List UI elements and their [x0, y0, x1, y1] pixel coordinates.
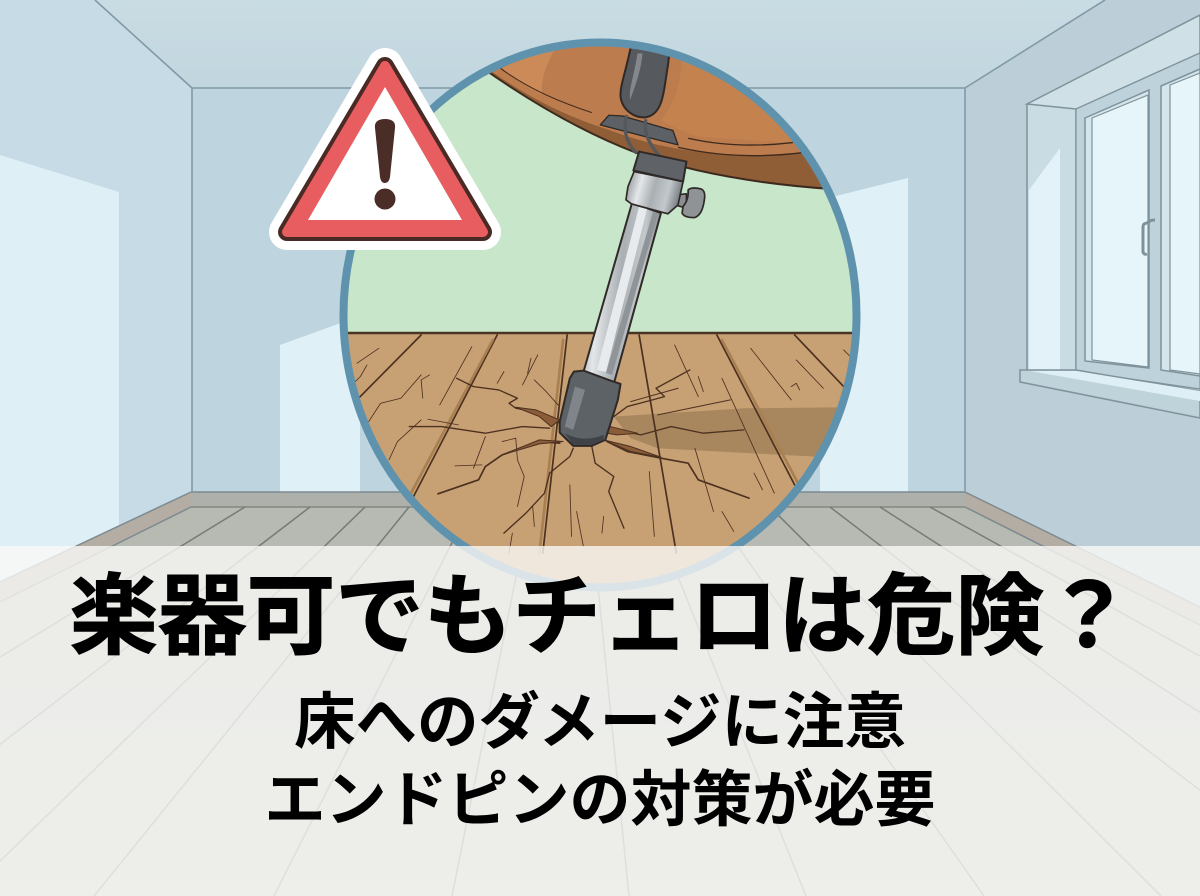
red triangle: [287, 66, 483, 232]
baseboard: [0, 492, 1200, 625]
floor planks: [0, 507, 1200, 896]
circle background wall: [344, 42, 856, 588]
translucent text panel: [0, 546, 1200, 896]
title: 楽器可でもチェロは危険？: [69, 567, 1133, 666]
fine scratches: [355, 345, 850, 553]
exclamation mark: [374, 119, 396, 210]
left wall: [0, 0, 192, 582]
main cracks: [409, 370, 749, 533]
subtitle: エンドピンの対策が必要: [264, 766, 936, 834]
seam highlights: [409, 340, 798, 553]
right wall: [965, 0, 1200, 607]
white inner: [308, 87, 462, 220]
window sill: [1020, 370, 1200, 418]
circle frame: [344, 42, 856, 588]
rubber foot: [560, 371, 621, 446]
back wall: [192, 88, 965, 492]
cello body: [489, 46, 824, 190]
dark border: [287, 66, 483, 232]
endpin assembly: [560, 152, 705, 446]
window recess: [1027, 15, 1200, 371]
right glass pane: [1161, 69, 1200, 376]
window frame: [1076, 53, 1200, 389]
subtitle: 床へのダメージに注意: [294, 688, 906, 757]
window: [1020, 15, 1200, 418]
clamp collar: [626, 152, 686, 214]
floor: [0, 492, 1200, 896]
magnified circle: cello endpin cracking floor: [340, 30, 867, 593]
ceiling: [0, 0, 1200, 88]
floor boards and cracks: [355, 335, 850, 553]
endpin holder sleeve: [600, 48, 679, 156]
warning triangle icon: [287, 66, 483, 232]
subtitle: [264, 688, 936, 834]
clamp knob: [675, 188, 705, 218]
board seams: [357, 335, 845, 553]
crack wedges: [502, 407, 661, 457]
window handle: [1143, 220, 1155, 254]
endpin tube: [582, 203, 661, 383]
wood floor: [340, 333, 860, 593]
white outline: [287, 66, 483, 232]
floor shadow: [614, 407, 847, 457]
left glass pane: [1085, 90, 1149, 368]
